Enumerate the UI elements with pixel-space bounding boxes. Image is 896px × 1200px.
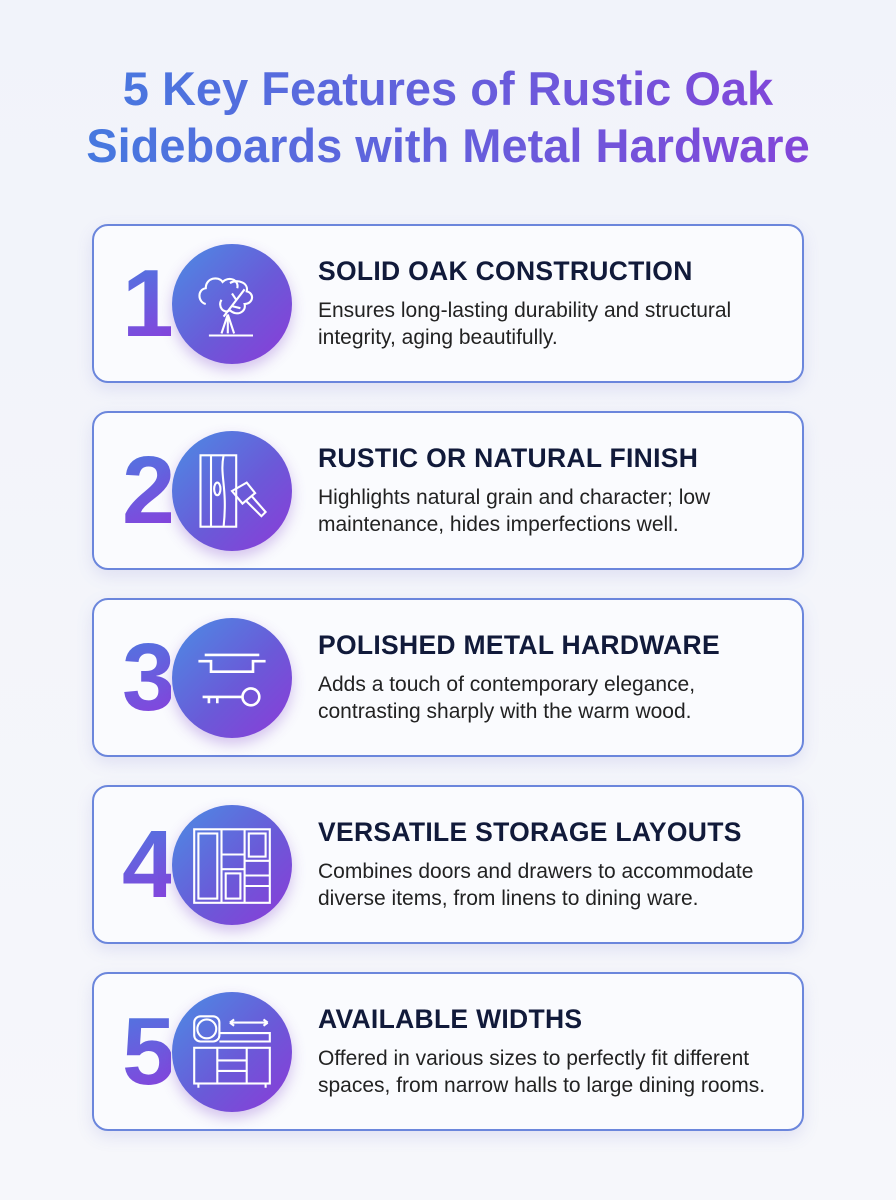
heading: RUSTIC OR NATURAL FINISH xyxy=(318,443,698,473)
text xyxy=(318,673,695,723)
text: contrasting sharply with the warm wood. xyxy=(318,700,692,723)
text: Adds a touch of contemporary elegance, xyxy=(318,673,695,696)
text: maintenance, hides imperfections well. xyxy=(318,513,679,536)
title: Sideboards with Metal Hardware xyxy=(86,119,810,172)
panel: widths xyxy=(92,972,804,1131)
panel: hardware xyxy=(92,598,804,757)
icon: tape and sideboard xyxy=(172,992,292,1112)
text: Offered in various sizes to perfectly fit different xyxy=(318,1047,749,1070)
text: Combines doors and drawers to accommodate xyxy=(318,860,753,883)
number 3: 3 xyxy=(122,624,171,731)
number 1: 1 xyxy=(122,250,171,357)
icon: handle and key xyxy=(172,618,292,738)
text: spaces, from narrow halls to large dining rooms. xyxy=(318,1074,765,1097)
text: integrity, aging beautifully. xyxy=(318,326,558,349)
number 5: 5 xyxy=(122,998,171,1105)
heading: VERSATILE STORAGE LAYOUTS xyxy=(318,817,742,847)
title: 5 Key Features of Rustic Oak xyxy=(123,62,773,115)
heading: POLISHED METAL HARDWARE xyxy=(318,630,720,660)
icon: tree xyxy=(172,244,292,364)
heading: AVAILABLE WIDTHS xyxy=(318,1004,582,1034)
number 2: 2 xyxy=(122,437,171,544)
text xyxy=(318,860,753,910)
text: Ensures long-lasting durability and structural xyxy=(318,299,731,322)
panel: solid oak xyxy=(92,224,804,383)
text xyxy=(318,1047,765,1097)
icon: wood and brush xyxy=(172,431,292,551)
panel: storage xyxy=(92,785,804,944)
text: diverse items, from linens to dining ware. xyxy=(318,887,698,910)
text xyxy=(318,486,710,536)
text xyxy=(318,299,731,349)
icon: cabinet xyxy=(172,805,292,925)
number 4: 4 xyxy=(122,811,171,918)
panel: finish xyxy=(92,411,804,570)
text: Highlights natural grain and character; low xyxy=(318,486,710,509)
title xyxy=(0,60,896,174)
heading: SOLID OAK CONSTRUCTION xyxy=(318,256,693,286)
